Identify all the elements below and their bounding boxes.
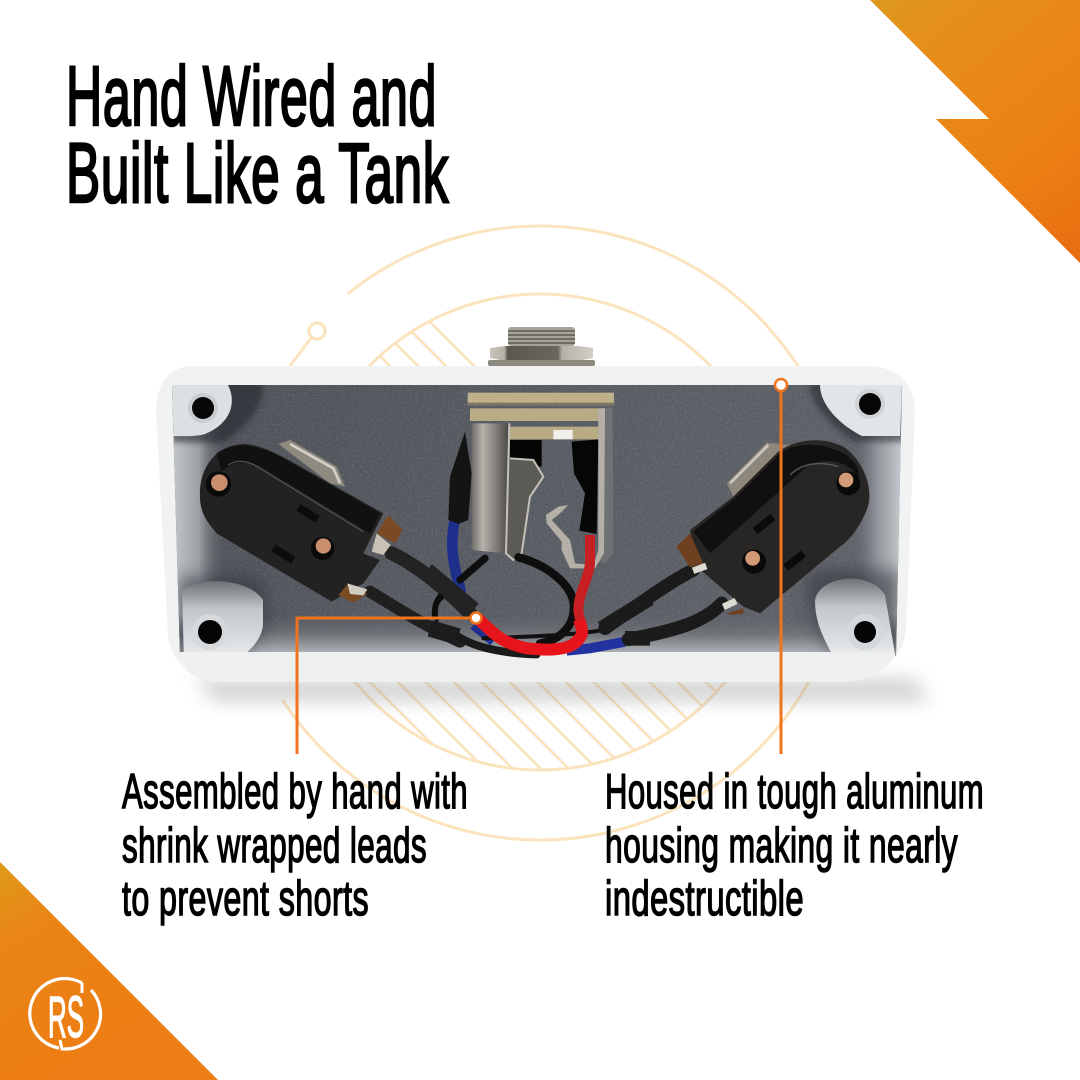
lower front lip [177, 652, 895, 682]
caption: left [122, 765, 468, 926]
screw boss: top right [810, 382, 905, 442]
right toggle switch [605, 440, 869, 639]
corner shape: top right orange [870, 0, 1080, 263]
screw boss: bottom right [807, 570, 900, 660]
title [66, 49, 449, 220]
logo: RS roundel: RS [48, 985, 84, 1050]
screw boss: top left [165, 380, 263, 443]
background circle graphic [282, 224, 810, 842]
enclosure interior [165, 380, 910, 665]
title: Hand Wired and [66, 49, 437, 143]
caption: left: Assembled by hand with [122, 765, 468, 819]
photo: open pedal enclosure with wiring [156, 327, 930, 754]
enclosure body [156, 366, 915, 682]
title: Built Like a Tank [66, 126, 449, 220]
callout line: shrink wrapped leads [297, 612, 482, 754]
screw boss: bottom left [178, 576, 268, 662]
center output jack [427, 393, 650, 654]
callout line: aluminum housing [775, 379, 787, 754]
logo: RS roundel [30, 978, 101, 1050]
enclosure shadow [195, 678, 930, 702]
caption: right [605, 765, 984, 926]
caption: left: shrink wrapped leads [122, 819, 427, 873]
left toggle switch [200, 440, 470, 642]
caption: left: to prevent shorts [122, 872, 369, 926]
top threaded jack nut [488, 327, 595, 366]
corner shape: bottom left orange [0, 862, 218, 1080]
caption: right: indestructible [605, 872, 804, 926]
